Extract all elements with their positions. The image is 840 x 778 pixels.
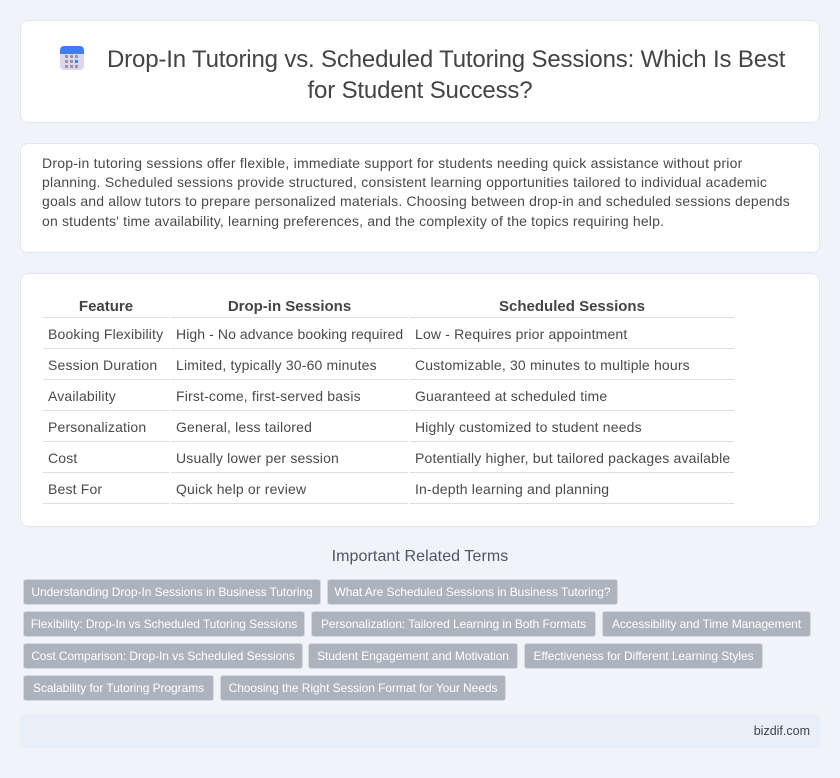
- comparison table: Personalization: [48, 419, 146, 435]
- intro paragraph: [42, 155, 790, 229]
- footer bar: [20, 714, 820, 748]
- comparison table: Booking Flexibility: [48, 326, 163, 342]
- related terms tags: Understanding Drop-In Sessions in Business Tutoring: [31, 585, 313, 599]
- title: [107, 46, 786, 104]
- comparison table: Session Duration: [48, 357, 157, 373]
- related terms tags: Effectiveness for Different Learning Styles: [534, 649, 754, 663]
- icon: calendar: [60, 46, 84, 70]
- related terms tags: Choosing the Right Session Format for Your Needs: [229, 681, 497, 695]
- related terms tags: [23, 579, 811, 701]
- panel: comparison table: [20, 273, 820, 527]
- comparison table: Potentially higher, but tailored packages available: [415, 450, 730, 466]
- related terms tags: Cost Comparison: Drop-In vs Scheduled Sessions: [31, 649, 295, 663]
- intro paragraph: planning. Scheduled sessions provide structured, consistent learning opportunities tailored to individual academic: [42, 174, 767, 190]
- comparison table: Scheduled Sessions: [499, 298, 645, 315]
- comparison table: First-come, first-served basis: [176, 388, 361, 404]
- related terms tags: Personalization: Tailored Learning in Both Formats: [321, 617, 586, 631]
- footer source text: bizdif.com: [754, 724, 810, 738]
- related terms tags: Scalability for Tutoring Programs: [33, 681, 204, 695]
- related terms heading: Important Related Terms: [332, 548, 508, 565]
- intro paragraph: Drop-in tutoring sessions offer flexible, immediate support for students needing quick assistance without prior: [42, 155, 743, 171]
- comparison table: Availability: [48, 388, 116, 404]
- panel: title card: [20, 20, 820, 123]
- title: Drop-In Tutoring vs. Scheduled Tutoring Sessions: Which Is Best: [107, 46, 785, 73]
- comparison table: Drop-in Sessions: [228, 298, 351, 315]
- intro paragraph: on students' time availability, learning preferences, and the complexity of the topics requiring help.: [42, 213, 664, 229]
- comparison table: Guaranteed at scheduled time: [415, 388, 607, 404]
- related terms tags: What Are Scheduled Sessions in Business Tutoring?: [334, 585, 611, 599]
- related terms tags: Student Engagement and Motivation: [317, 649, 509, 663]
- intro paragraph: goals and allow tutors to prepare personalized materials. Choosing between drop-in and scheduled sessions depends: [42, 193, 790, 209]
- comparison table: Limited, typically 30-60 minutes: [176, 357, 377, 373]
- related terms tags: Accessibility and Time Management: [612, 617, 801, 631]
- comparison table: In-depth learning and planning: [415, 481, 609, 497]
- comparison table: Usually lower per session: [176, 450, 339, 466]
- comparison table: Customizable, 30 minutes to multiple hours: [415, 357, 690, 373]
- comparison table: Low - Requires prior appointment: [415, 326, 627, 342]
- comparison table: Cost: [48, 450, 77, 466]
- comparison table: General, less tailored: [176, 419, 312, 435]
- comparison table: Best For: [48, 481, 102, 497]
- related terms tags: Flexibility: Drop-In vs Scheduled Tutoring Sessions: [31, 617, 297, 631]
- comparison table: High - No advance booking required: [176, 326, 403, 342]
- panel: introduction text: [20, 143, 820, 253]
- comparison table: Feature: [79, 298, 133, 315]
- comparison table: [43, 298, 734, 504]
- comparison table: Quick help or review: [176, 481, 306, 497]
- comparison table: Highly customized to student needs: [415, 419, 642, 435]
- title: for Student Success?: [308, 77, 532, 104]
